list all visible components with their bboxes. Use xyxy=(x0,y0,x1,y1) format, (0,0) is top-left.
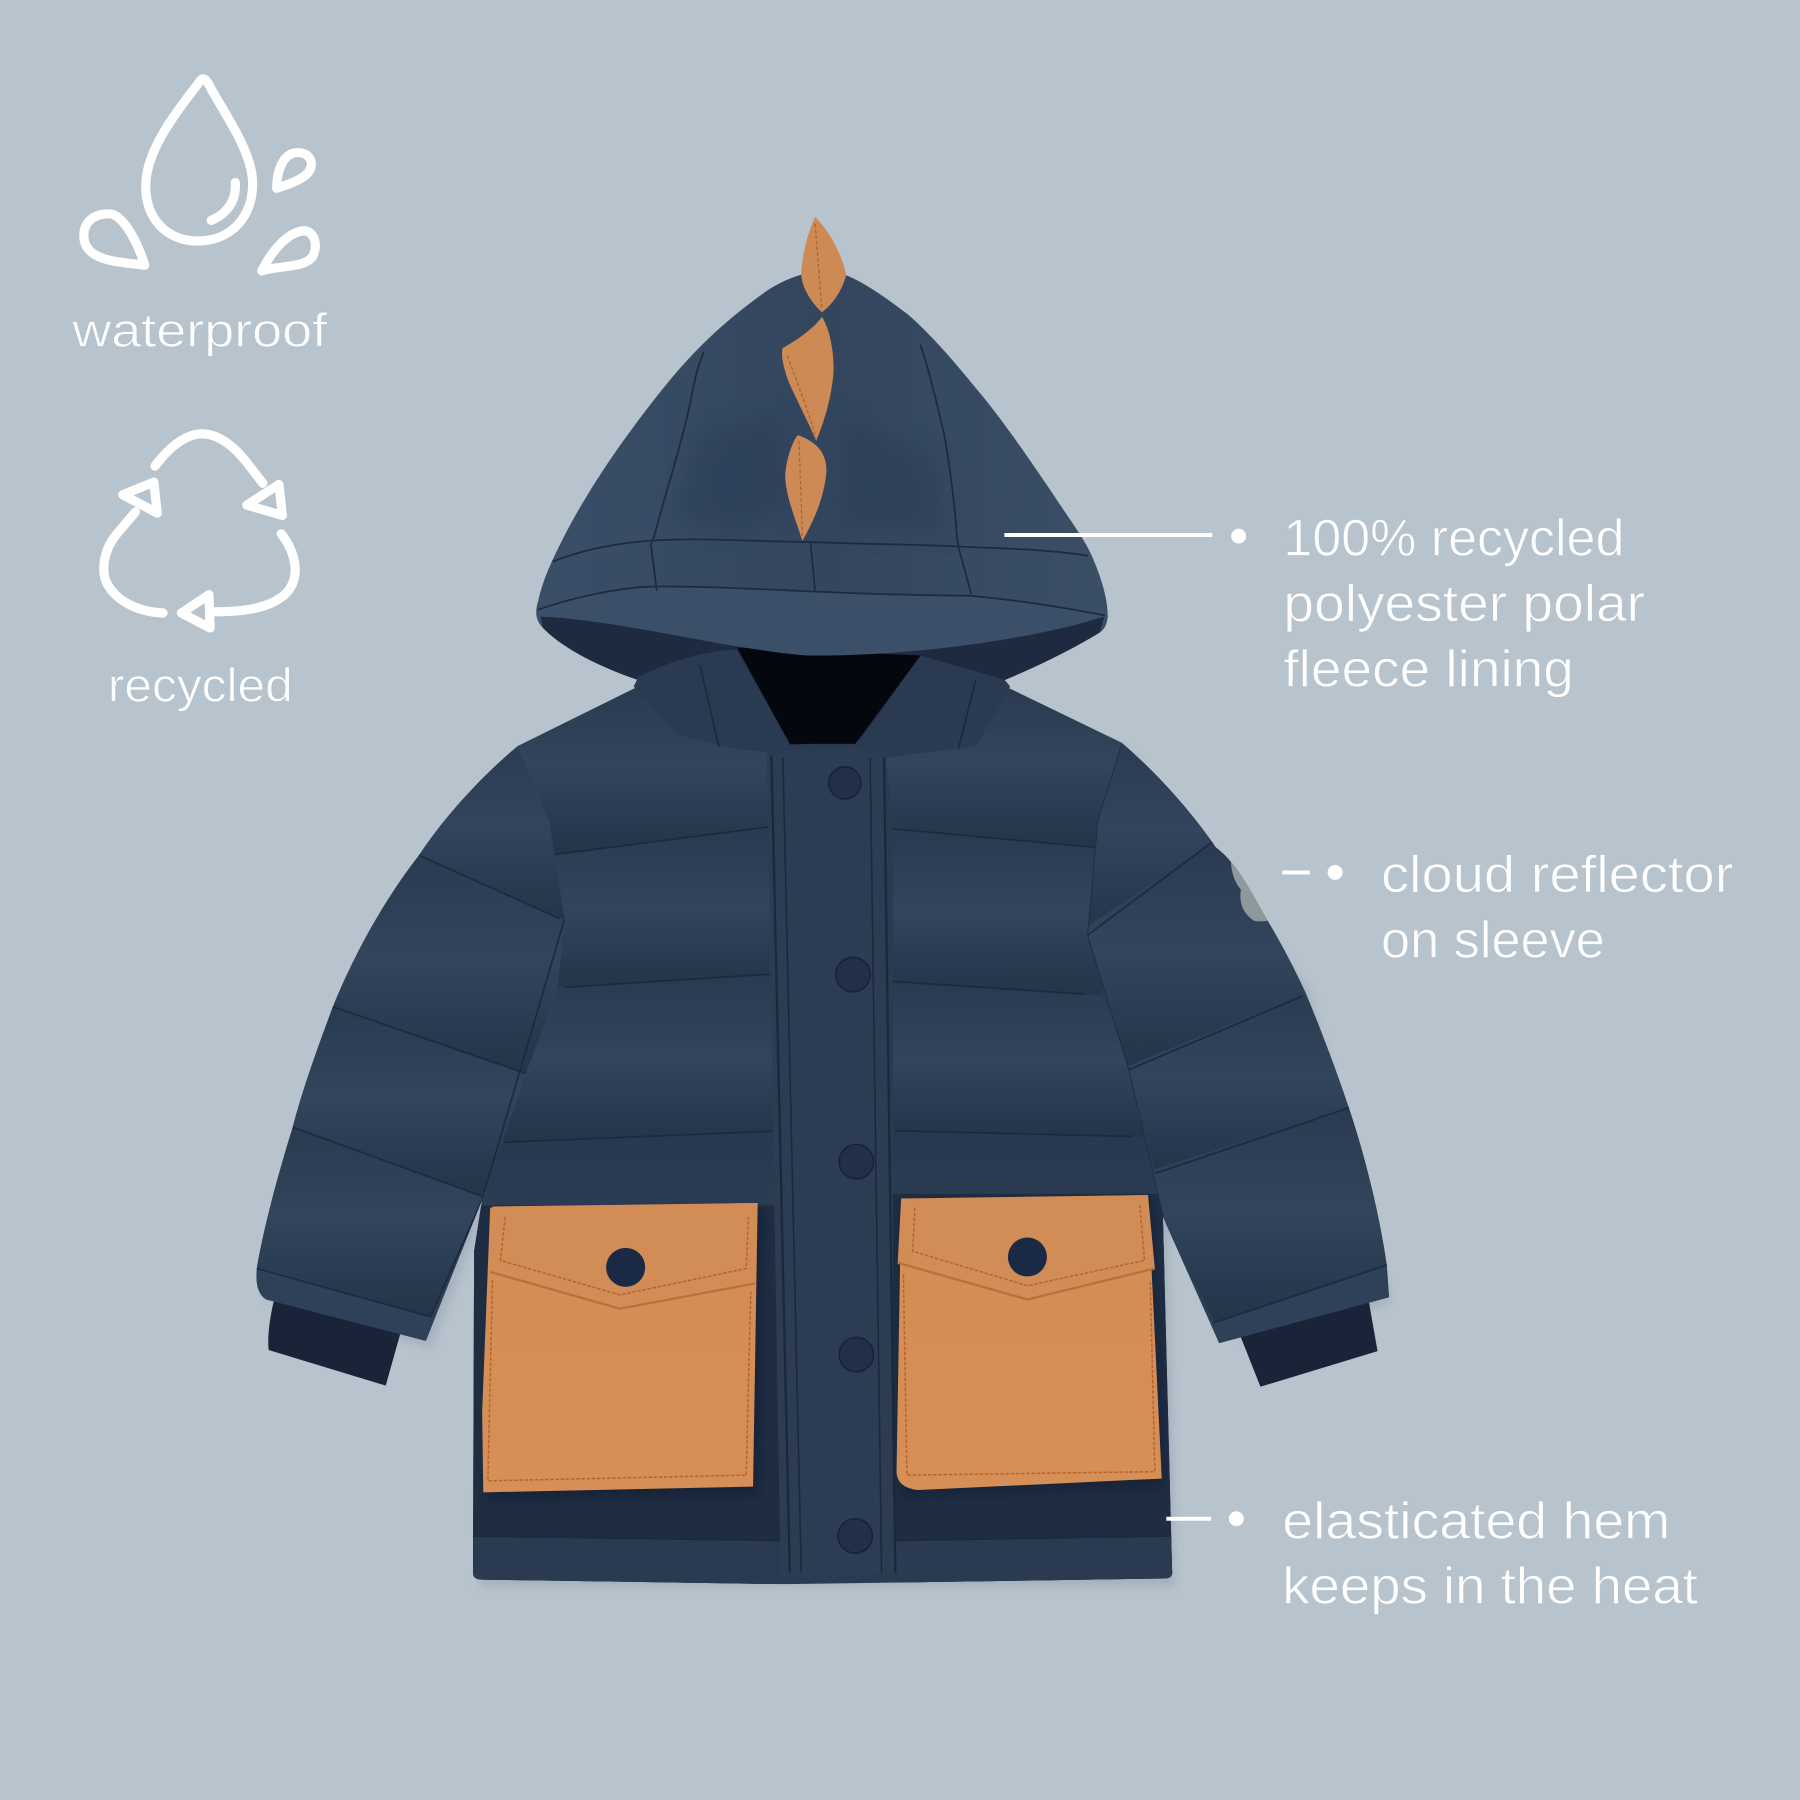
dino spikes xyxy=(782,217,846,541)
callout: lining xyxy=(1004,509,1645,697)
jacket illustration xyxy=(241,217,1406,1596)
ground shadow xyxy=(264,712,1391,1586)
callout: lining: polyester polar xyxy=(1283,574,1645,632)
placket buttons xyxy=(829,767,874,1553)
callout: hem xyxy=(1166,1491,1698,1615)
right knit cuff xyxy=(1234,1286,1378,1387)
callout: lining: 100% recycled xyxy=(1283,509,1624,567)
callout: reflector: on sleeve xyxy=(1381,910,1605,968)
right sleeve xyxy=(1087,742,1389,1344)
hood xyxy=(536,271,1108,746)
infographic canvas xyxy=(72,74,1732,1614)
callout: reflector: cloud reflector xyxy=(1381,845,1733,903)
left pocket xyxy=(482,1203,762,1499)
callout: lining: fleece lining xyxy=(1283,639,1574,697)
icon: recycled arrows xyxy=(104,434,295,628)
front placket xyxy=(767,746,895,1577)
callout: hem: elasticated hem xyxy=(1282,1491,1670,1549)
jacket body xyxy=(459,677,1194,1596)
callout: hem: keeps in the heat xyxy=(1282,1557,1698,1615)
collar flaps xyxy=(634,650,1010,758)
label: recycled: recycled xyxy=(108,658,293,711)
right pocket xyxy=(897,1195,1164,1496)
left sleeve xyxy=(256,746,565,1341)
callout: reflector xyxy=(1282,845,1733,968)
icon: cloud reflector xyxy=(1230,862,1268,922)
left knit cuff xyxy=(268,1286,404,1386)
icon: waterproof drops xyxy=(84,79,315,271)
label: waterproof: waterproof xyxy=(71,304,328,357)
